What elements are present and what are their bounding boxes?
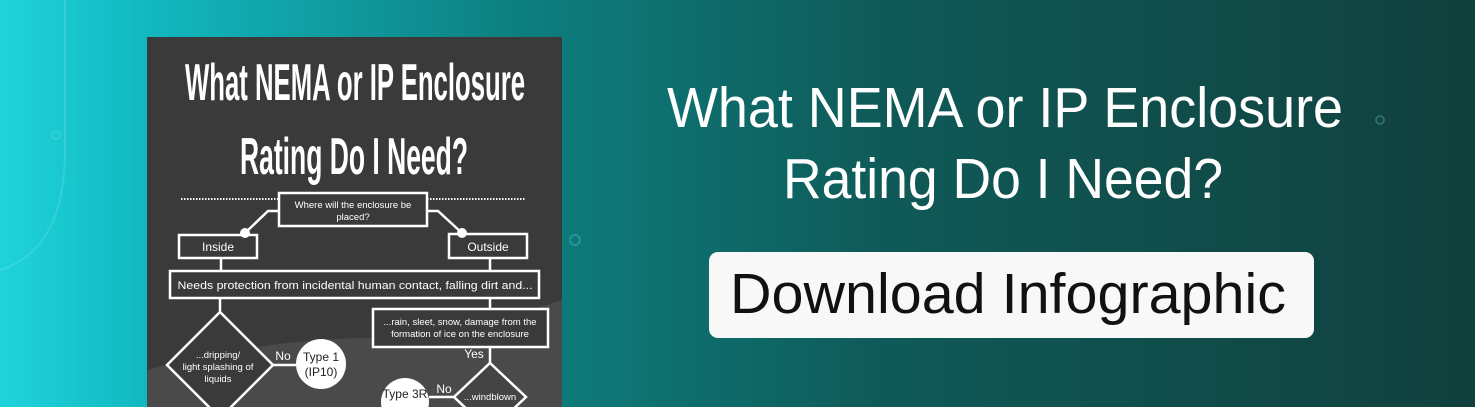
poster: Outside — [467, 240, 509, 254]
poster: placed? — [336, 212, 370, 223]
poster title — [185, 54, 525, 186]
poster: formation of ice on the enclosure — [391, 329, 529, 340]
heading: What NEMA or IP Enclosure — [667, 76, 1343, 140]
poster: No — [275, 349, 291, 363]
poster title: Rating Do I Need? — [240, 128, 468, 186]
flowchart — [167, 193, 548, 407]
button: download — [709, 252, 1314, 338]
poster: ...windblown — [464, 392, 516, 403]
poster: Type 1 — [303, 350, 339, 364]
poster: ...dripping/ — [196, 350, 241, 361]
heading — [667, 76, 1343, 211]
poster: light splashing of — [183, 362, 254, 373]
poster: Yes — [464, 347, 484, 361]
poster: No — [436, 382, 452, 396]
poster — [147, 37, 562, 407]
poster: Where will the enclosure be — [295, 200, 411, 211]
poster: What NEMA or IP Enclosure — [185, 54, 525, 112]
poster: Needs protection from incidental human contact, falling dirt and... — [178, 280, 532, 292]
button: download: Download Infographic — [730, 262, 1286, 326]
poster: Inside — [202, 240, 234, 254]
poster: (IP10) — [305, 365, 337, 379]
poster: Type 3R — [383, 387, 428, 401]
poster: liquids — [205, 374, 232, 385]
poster: ...rain, sleet, snow, damage from the — [383, 317, 537, 328]
heading: Rating Do I Need? — [783, 147, 1223, 211]
